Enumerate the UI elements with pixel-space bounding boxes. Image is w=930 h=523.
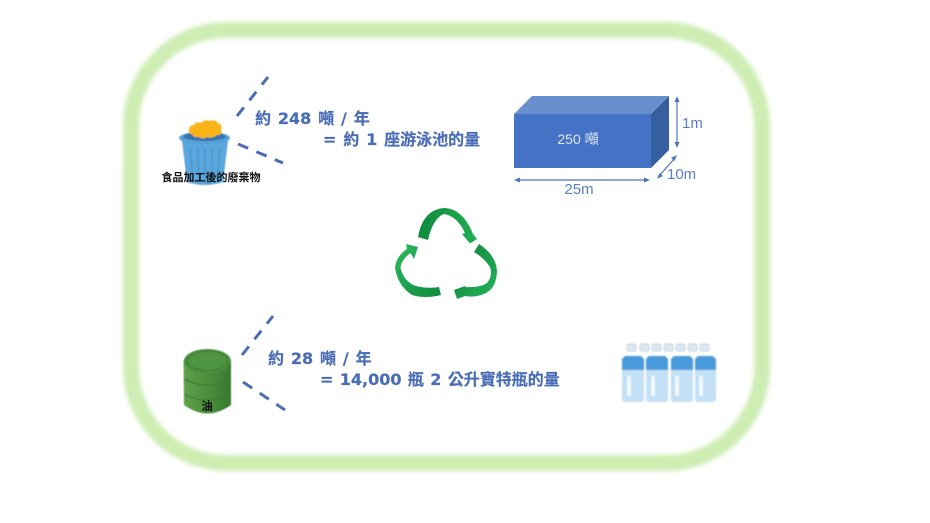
icon: swimming pool cuboid (514, 96, 669, 168)
label: food waste: 食品加工後的廢棄物 (162, 170, 260, 184)
icon: water bottles (622, 344, 716, 402)
label: oil: 油 (201, 399, 213, 413)
icon: recycling arrows (395, 208, 497, 299)
garbage (189, 120, 222, 138)
dashed lines: oil (242, 316, 285, 410)
dashed lines: food waste (237, 77, 283, 163)
arrow: left (395, 244, 441, 297)
text: oil amount (268, 349, 560, 389)
dimension: 25m: 25m (564, 181, 594, 198)
arrow: right (454, 244, 497, 299)
panel: rounded green frame (131, 30, 762, 463)
text: oil amount: = 14,000 瓶 2 公升寶特瓶的量 (320, 370, 560, 389)
dimension: 10m (657, 155, 696, 183)
icon: waste bin (179, 120, 230, 185)
text: food waste amount: = 約 1 座游泳池的量 (323, 130, 480, 149)
text: food waste amount: 約 248 噸 / 年 (255, 109, 370, 128)
icon: oil drum (184, 349, 231, 414)
dimension: 10m: 10m (667, 166, 696, 183)
dimension: 1m: 1m (682, 115, 703, 132)
label: 250 tons: 250 噸 (557, 131, 599, 147)
text: oil amount: 約 28 噸 / 年 (268, 349, 372, 368)
text: food waste amount (255, 109, 480, 149)
arrow: top (418, 208, 477, 244)
dimension: 1m (674, 96, 703, 148)
dimension: 25m (514, 178, 650, 198)
